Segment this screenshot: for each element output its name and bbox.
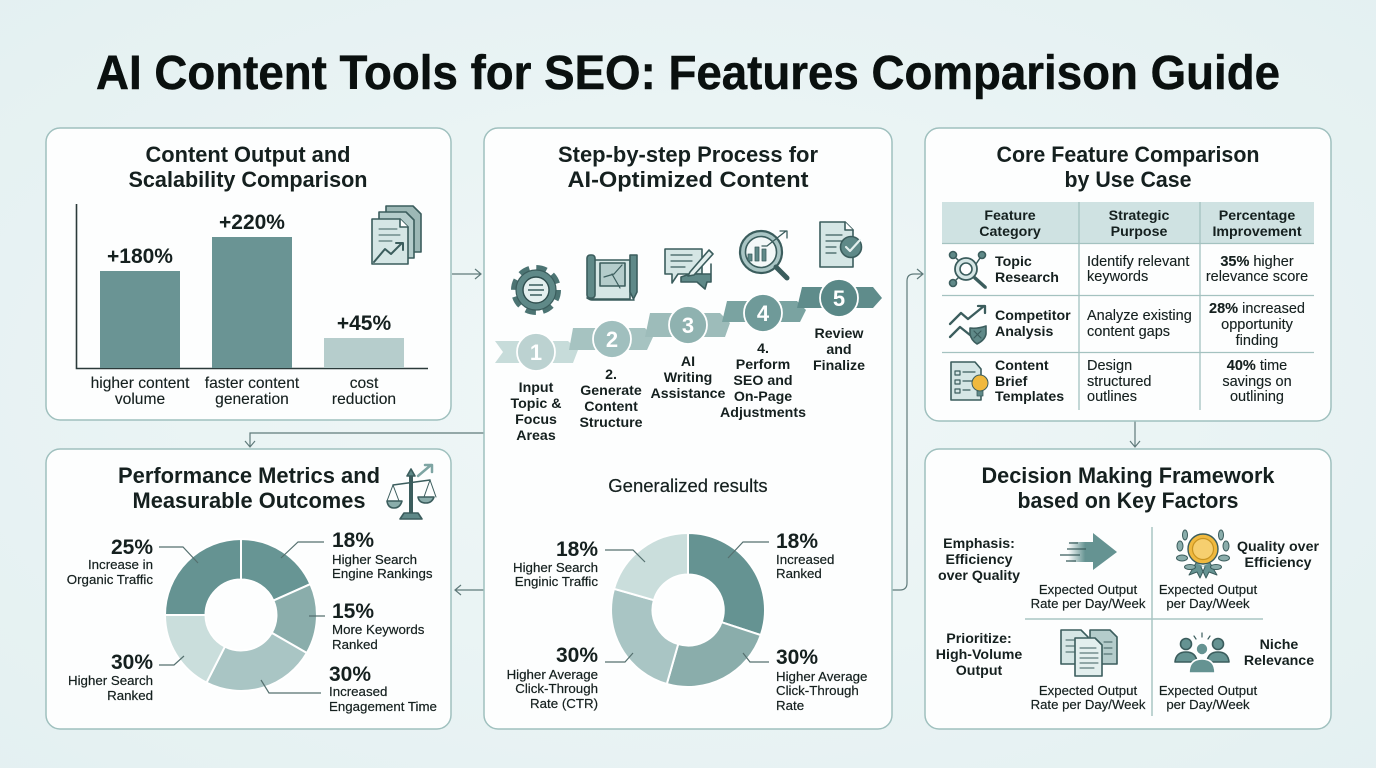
donut chart: generalized results: Enginic Traffic [515, 574, 598, 589]
donut chart: performance metrics: More Keywords [332, 622, 425, 637]
icon: medal with laurel [1176, 530, 1230, 578]
step labels: Input [519, 380, 554, 396]
donut chart: performance metrics: 30% [111, 651, 153, 674]
decision factor labels: over Quality [938, 568, 1020, 584]
decision factor labels: Efficiency [1244, 555, 1312, 571]
step labels: Topic & [511, 396, 561, 412]
heading: process: AI-Optimized Content [568, 167, 809, 192]
decision quadrant dividers [1025, 527, 1263, 716]
comparison table: Feature [984, 208, 1036, 224]
comparison table [942, 202, 1314, 410]
comparison table: keywords [1087, 269, 1148, 285]
comparison table: Percentage [1219, 208, 1295, 224]
bar chart: volume [115, 391, 165, 408]
donut chart: performance metrics [67, 529, 437, 714]
comparison table: Analysis [995, 324, 1053, 340]
comparison table: Content [995, 358, 1049, 374]
heading: decision framework [982, 463, 1275, 513]
comparison table: Templates [995, 389, 1064, 405]
step labels: Areas [516, 428, 556, 444]
decision factor labels: Relevance [1244, 653, 1314, 669]
donut chart: performance metrics: Engagement Time [329, 699, 437, 714]
icon: document stack with growth arrow [372, 206, 421, 264]
heading: feature comparison [996, 142, 1260, 192]
step labels: Perform [736, 357, 790, 373]
comparison table: Identify relevant [1087, 254, 1189, 270]
decision factor labels: Emphasis: [943, 536, 1015, 552]
step labels: Focus [515, 412, 557, 428]
heading: feature comparison: by Use Case [1064, 167, 1192, 192]
heading: content output: Scalability Comparison [128, 167, 368, 192]
donut chart: generalized results: 18% [776, 530, 818, 553]
donut chart: generalized results: Higher Search [513, 560, 598, 575]
heading: content output: Content Output and [146, 142, 350, 167]
comparison table: Improvement [1212, 224, 1302, 240]
heading: decision framework: Decision Making Framework [982, 463, 1275, 488]
comparison table: Purpose [1111, 224, 1167, 240]
donut chart: generalized results: Increased [776, 552, 834, 567]
icon: people group [1175, 633, 1229, 673]
bar chart: +180% [107, 245, 173, 268]
comparison table: outlines [1087, 389, 1137, 405]
heading: feature comparison: Core Feature Comparison [996, 142, 1260, 167]
step labels [511, 326, 865, 444]
arrow: process panel to feature panel [892, 269, 923, 590]
decision factor labels: Output [956, 663, 1003, 679]
bar chart: higher content [91, 375, 190, 392]
decision factor labels: Rate per Day/Week [1031, 697, 1146, 712]
comparison table: 28% increased [1209, 301, 1305, 317]
donut chart: performance metrics: Increase in [88, 557, 153, 572]
comparison table: opportunity [1221, 317, 1294, 333]
step labels: Assistance [651, 386, 726, 402]
decision factor labels: Rate per Day/Week [1031, 596, 1146, 611]
step labels: Content [584, 399, 638, 415]
donut chart: generalized results [507, 530, 867, 713]
step labels: Finalize [813, 358, 865, 374]
step labels: Structure [579, 415, 643, 431]
comparison table: structured [1087, 374, 1151, 390]
step labels: On-Page [734, 389, 792, 405]
decision factor labels [936, 536, 1319, 712]
step labels: 2. [605, 367, 617, 383]
icon: scales with growth arrow [387, 465, 436, 519]
donut chart: performance metrics: 15% [332, 600, 374, 623]
step labels: Review [815, 326, 864, 342]
donut chart: generalized results: Ranked [776, 566, 822, 581]
icon: competitor analysis [950, 306, 986, 344]
heading: performance metrics [118, 463, 380, 513]
step labels: 4. [757, 341, 769, 357]
comparison table: Topic [995, 254, 1032, 270]
arrow: output panel to process panel [452, 269, 481, 279]
donut chart: performance metrics: Organic Traffic [67, 572, 153, 587]
icon: magnifier with chart [740, 231, 787, 278]
decision factor labels: per Day/Week [1166, 596, 1250, 611]
bar chart: +220% [219, 211, 285, 234]
process ribbon with numbered steps: 2 [606, 327, 618, 352]
comparison table: content gaps [1087, 324, 1170, 340]
donut chart: generalized results: Click-Through [776, 683, 859, 698]
comparison table: Design [1087, 358, 1132, 374]
donut chart: generalized results: Click-Through [515, 681, 598, 696]
icon: content brief template [951, 362, 988, 400]
arrow: process panel to performance panel (top) [245, 433, 484, 447]
decision factor labels: Expected Output [1039, 582, 1137, 597]
donut chart: performance metrics: 25% [111, 536, 153, 559]
comparison table: Research [995, 270, 1059, 286]
icon: chat and pencil [665, 249, 713, 289]
donut chart: performance metrics: Ranked [107, 688, 153, 703]
process ribbon with numbered steps: 5 [833, 286, 845, 311]
icon: blueprint and pencil [587, 255, 637, 300]
arrow: feature panel to decision panel [1130, 421, 1140, 447]
comparison table: savings on [1222, 374, 1292, 390]
bar chart: cost [350, 375, 379, 392]
panel: step-by-step process [484, 128, 892, 729]
donut chart: performance metrics: 18% [332, 529, 374, 552]
decision factor labels: Quality over [1237, 539, 1319, 555]
comparison table: Competitor [995, 308, 1071, 324]
decision factor labels: per Day/Week [1166, 697, 1250, 712]
icon: gear [514, 268, 558, 312]
subheading: generalized results: Generalized results [608, 475, 768, 496]
donut chart: generalized results: Rate (CTR) [530, 696, 598, 711]
heading: content output [128, 142, 368, 192]
heading: process: Step-by-step Process for [558, 142, 818, 167]
panel: content output and scalability [46, 128, 451, 420]
heading: performance metrics: Measurable Outcomes [132, 488, 366, 513]
heading: decision framework: based on Key Factors [1018, 488, 1238, 513]
step labels: Adjustments [720, 405, 806, 421]
icon: topic research [950, 252, 986, 288]
step labels: SEO and [733, 373, 793, 389]
comparison table: relevance score [1206, 269, 1308, 285]
bar chart: generation [215, 391, 289, 408]
donut chart: performance metrics: Higher Search [332, 552, 417, 567]
process ribbon with numbered steps: 1 [530, 340, 542, 365]
comparison table: 40% time [1227, 358, 1287, 374]
panel: decision making framework [925, 449, 1331, 729]
decision factor labels: High-Volume [936, 647, 1022, 663]
bar chart: reduction [332, 391, 396, 408]
step labels: AI [681, 354, 695, 370]
panel: core feature comparison [925, 128, 1331, 421]
decision factor labels: Prioritize: [946, 631, 1012, 647]
donut chart: generalized results: 30% [776, 646, 818, 669]
step labels: Writing [664, 370, 712, 386]
process ribbon with numbered steps: 4 [757, 301, 770, 326]
donut chart: generalized results: Higher Average [507, 667, 598, 682]
process ribbon with numbered steps: 3 [682, 313, 694, 338]
decision factor labels: Expected Output [1159, 683, 1257, 698]
arrow: process panel to performance panel (bottom) [455, 585, 484, 595]
heading: process [558, 142, 818, 192]
bar chart: +45% [337, 312, 391, 335]
comparison table: Brief [995, 374, 1028, 390]
comparison table: Category [979, 224, 1041, 240]
bar chart [76, 204, 428, 408]
bar chart: faster content [205, 375, 300, 392]
donut chart: performance metrics: Higher Search [68, 673, 153, 688]
donut chart: generalized results: Rate [776, 698, 804, 713]
donut chart: performance metrics: Ranked [332, 637, 378, 652]
comparison table: Strategic [1109, 208, 1169, 224]
decision factor labels: Niche [1260, 637, 1298, 653]
heading: performance metrics: Performance Metrics and [118, 463, 380, 488]
comparison table: finding [1236, 333, 1278, 349]
comparison table: outlining [1230, 389, 1284, 405]
donut chart: generalized results: Higher Average [776, 669, 867, 684]
step labels: and [826, 342, 852, 358]
donut chart: performance metrics: Engine Rankings [332, 566, 433, 581]
icon: documents [1061, 630, 1117, 676]
donut chart: performance metrics: Increased [329, 684, 387, 699]
decision factor labels: Expected Output [1039, 683, 1137, 698]
comparison table: 35% higher [1220, 254, 1294, 270]
donut chart: performance metrics: 30% [329, 663, 371, 686]
title: AI Content Tools for SEO: Features Comparison Guide [96, 47, 1280, 100]
donut chart: generalized results: 30% [556, 644, 598, 667]
decision factor labels: Expected Output [1159, 582, 1257, 597]
donut chart: generalized results: 18% [556, 538, 598, 561]
comparison table: Analyze existing [1087, 308, 1192, 324]
icon: document with checkmark [820, 222, 862, 267]
step labels: Generate [580, 383, 642, 399]
panel: performance metrics [46, 449, 451, 729]
process ribbon with numbered steps [495, 279, 882, 371]
icon: speed arrow [1060, 533, 1117, 570]
decision factor labels: Efficiency [945, 552, 1013, 568]
